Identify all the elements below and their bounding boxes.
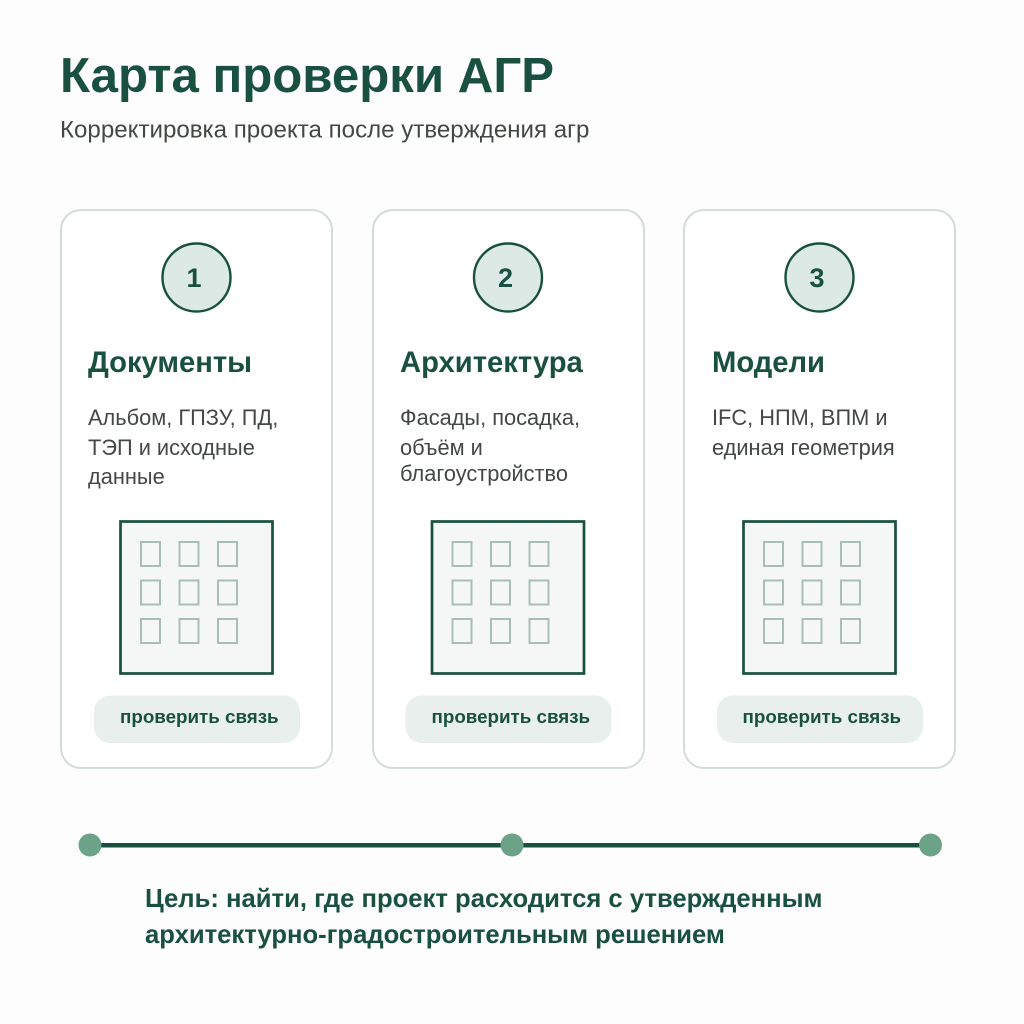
button: check link: проверить связь [742, 706, 901, 727]
heading: architecture: Архитектура [400, 347, 584, 379]
description: architecture: благоустройство [400, 461, 568, 486]
panel: models [684, 210, 955, 768]
title: Карта проверки АГР [60, 48, 554, 103]
description: models: единая геометрия [712, 435, 895, 460]
panel: documents [61, 210, 332, 768]
goal statement: Цель: найти, где проект расходится с утвержденным [145, 885, 823, 913]
button: check link: проверить связь [432, 706, 590, 727]
button: check link: проверить связь [120, 706, 279, 727]
button: check link [717, 696, 923, 743]
subtitle: Корректировка проекта после утверждения агр [60, 116, 589, 144]
number badge 1 [162, 244, 230, 312]
icon: building grid [432, 522, 584, 674]
goal statement: архитектурно-градостроительным решением [145, 921, 725, 949]
description: architecture: Фасады, посадка, [400, 405, 580, 430]
button: check link [406, 696, 612, 743]
heading: documents: Документы [88, 347, 252, 379]
button: check link [94, 696, 300, 743]
panel: architecture [373, 210, 644, 768]
heading: models: Модели [712, 347, 825, 379]
icon: building grid [120, 522, 272, 674]
description: documents: Альбом, ГПЗУ, ПД, [88, 405, 278, 430]
description: architecture: объём и [400, 435, 483, 460]
number badge 3 [786, 244, 854, 312]
number badge 1: 1 [186, 263, 202, 293]
number badge 2 [474, 244, 542, 312]
description: documents: ТЭП и исходные [88, 435, 255, 460]
timeline [78, 834, 942, 856]
description: models: IFC, НПМ, ВПМ и [712, 405, 888, 430]
number badge 3: 3 [809, 263, 825, 293]
number badge 2: 2 [498, 263, 513, 293]
description: documents: данные [88, 464, 165, 489]
icon: building grid [744, 522, 896, 674]
